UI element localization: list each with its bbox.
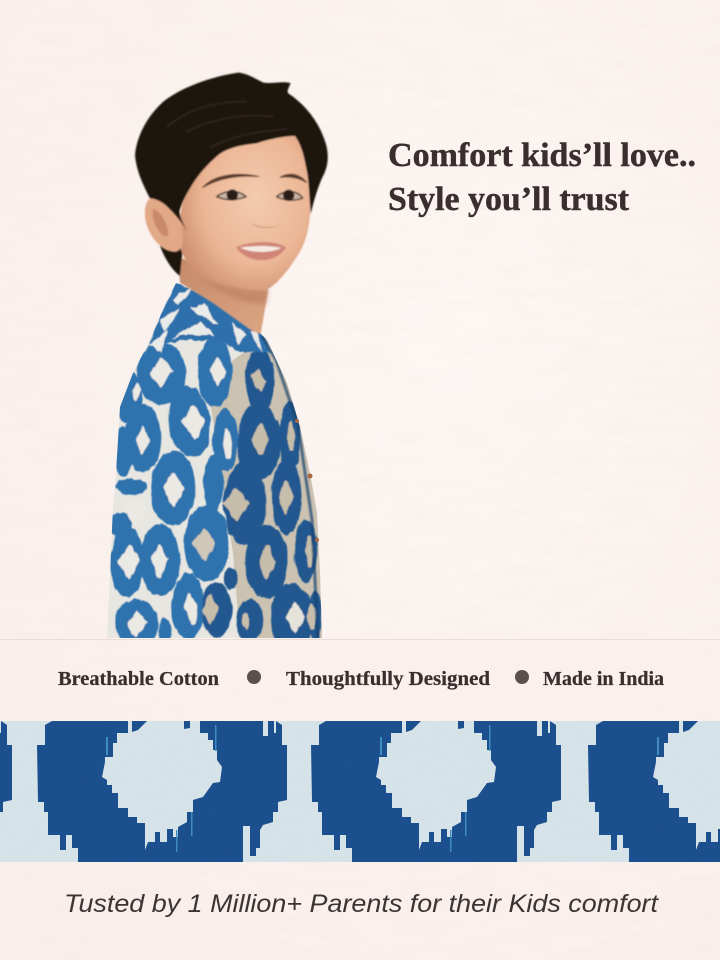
eyebrows [203, 174, 307, 188]
feature: breathable cotton: Breathable Cotton [58, 668, 220, 690]
separator dot [247, 670, 261, 684]
feature: made in india: Made in India [543, 668, 664, 690]
ikat print [109, 283, 322, 650]
mouth [236, 242, 286, 260]
hair [135, 73, 328, 230]
features strip [0, 639, 720, 721]
hair sheen [167, 102, 287, 147]
eyes [217, 191, 303, 200]
ikat fabric band [0, 721, 720, 862]
ear [145, 198, 183, 252]
kurta [107, 283, 322, 638]
buttons [295, 419, 319, 542]
placket shadow [262, 336, 318, 640]
inner ear [153, 208, 168, 237]
body ikat rings [202, 348, 322, 650]
nose [250, 223, 283, 228]
boy in ikat kurta [100, 73, 330, 650]
trust line: Tusted by 1 Million+ Parents for their Kids comfort [64, 890, 659, 918]
face [180, 123, 310, 290]
neck [178, 257, 268, 334]
headline: Style you’ll trust [388, 181, 630, 218]
head [135, 73, 328, 334]
kurta front panel [210, 336, 325, 640]
sleeve ikat rings [109, 336, 238, 647]
irises [227, 189, 294, 201]
hair at the nape [159, 240, 183, 276]
shoulder and collar print [150, 283, 272, 352]
separator dot [515, 670, 529, 684]
feature: thoughtfully designed: Thoughtfully Designed [286, 668, 491, 690]
teeth [240, 246, 282, 252]
neck shadow [197, 277, 268, 305]
headline [388, 137, 696, 218]
headline: Comfort kids’ll love.. [388, 137, 696, 174]
